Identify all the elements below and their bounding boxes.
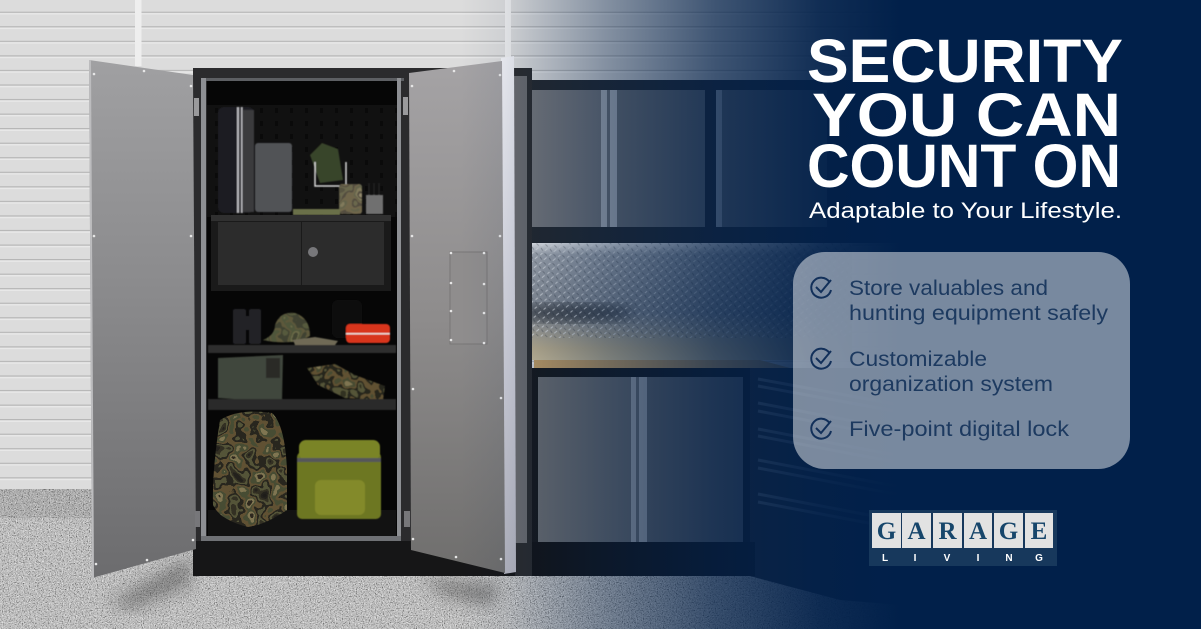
- feature: organization: Customizable: [849, 348, 987, 371]
- title: [807, 27, 1123, 200]
- feature: digital lock: Five-point digital lock: [849, 418, 1070, 441]
- camo cap: [263, 311, 310, 344]
- feature: store valuables: hunting equipment safely: [849, 302, 1109, 325]
- feature: organization: [811, 348, 1053, 396]
- shelf contents: top shelf: [218, 107, 383, 215]
- background: speckled floor: [0, 489, 1201, 629]
- shelf two: [208, 399, 396, 410]
- camo backpack: [212, 408, 288, 528]
- open left door: [89, 60, 200, 578]
- logo: Garage Living: L: [882, 553, 888, 564]
- interior: [207, 81, 397, 537]
- upper cabinets: [527, 80, 907, 243]
- main safe cabinet: [193, 68, 532, 576]
- logo: Garage Living: R: [938, 518, 957, 545]
- feature: organization: organization system: [849, 373, 1053, 396]
- background: slatted wall: [0, 0, 1201, 490]
- logo: Garage Living: V: [944, 553, 951, 564]
- lockbox drawer: [211, 215, 391, 291]
- subtitle: Adaptable to Your Lifestyle.: [809, 198, 1122, 223]
- green pouch: [310, 143, 346, 186]
- logo: Garage Living: G: [999, 518, 1018, 545]
- gloves: [293, 337, 338, 345]
- cabinet body: [193, 68, 532, 576]
- logo: Garage Living: G: [1035, 553, 1043, 564]
- icon: check circle: [811, 349, 831, 369]
- middle shelf contents: [208, 300, 396, 410]
- logo: Garage Living: A: [907, 518, 926, 545]
- logo: Garage Living: I: [977, 553, 980, 564]
- plinth: [193, 541, 515, 576]
- cabinet floor contents: [208, 408, 396, 536]
- shelf one: [208, 345, 396, 353]
- logo: Garage Living: [869, 510, 1057, 566]
- title: YOU CAN: [812, 81, 1121, 149]
- title: COUNT ON: [807, 132, 1121, 200]
- title: SECURITY: [807, 27, 1123, 95]
- icon: check circle: [811, 419, 831, 439]
- camo gloves: [307, 364, 385, 400]
- strap: [293, 209, 340, 215]
- icon: check circle: [811, 278, 831, 298]
- dark bag: [332, 300, 362, 338]
- interior frame: [201, 78, 404, 541]
- ammo box: [218, 355, 283, 402]
- door edge: [501, 56, 516, 574]
- panel: feature list: [793, 252, 1130, 469]
- diamond plate backsplash: [532, 243, 809, 360]
- corner drawers: [750, 368, 900, 605]
- logo: Garage Living: G: [877, 518, 896, 545]
- logo: Garage Living: A: [969, 518, 987, 545]
- open right door: [403, 56, 516, 574]
- access plate: [450, 252, 487, 344]
- navy gradient overlay: [460, 0, 900, 629]
- lower cabinets: [527, 368, 757, 576]
- olive cooler: [297, 440, 381, 519]
- trail camera: [339, 184, 362, 214]
- small device: [366, 183, 383, 214]
- logo: Garage Living: E: [1031, 518, 1047, 545]
- right body side: [514, 76, 527, 543]
- red first aid case: [346, 324, 390, 343]
- logo: Garage Living: N: [1005, 553, 1013, 564]
- solid navy right side: [900, 0, 1201, 629]
- binoculars: [233, 309, 261, 344]
- feature: store valuables: Store valuables and: [849, 277, 1048, 300]
- base plinth: [515, 542, 755, 576]
- logo: Garage Living: I: [914, 553, 917, 564]
- door shadows on floor: [110, 556, 500, 610]
- feature: store valuables: [811, 277, 1109, 325]
- grey case: [255, 143, 292, 212]
- side cabinets: [532, 80, 853, 600]
- hard case: [218, 107, 254, 213]
- butcher block counter: [534, 360, 790, 368]
